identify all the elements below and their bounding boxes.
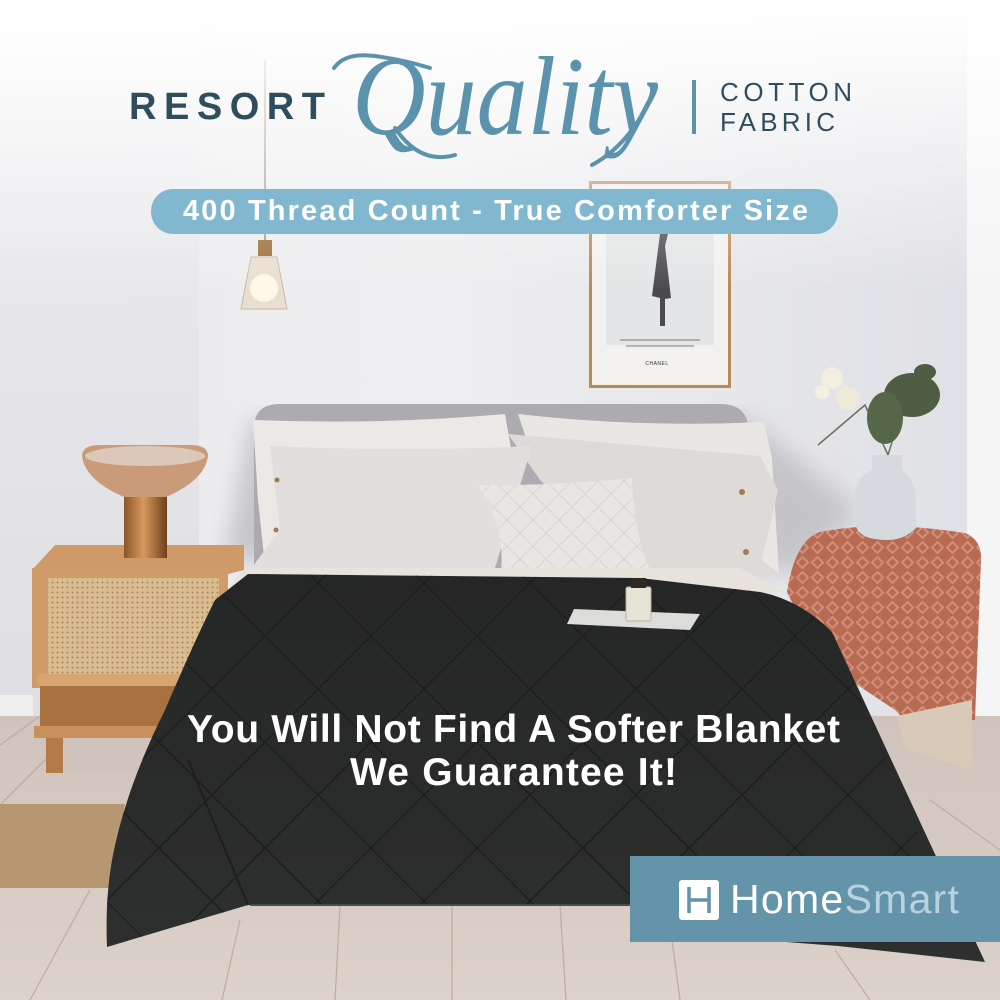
brand name: HomeSmart [730, 876, 960, 922]
subheading: cotton fabric [720, 77, 852, 137]
icon: H logo [679, 880, 719, 920]
bed sheet [225, 568, 785, 592]
table lamp [82, 445, 208, 558]
guarantee text: You Will Not Find A Softer Blanket [187, 708, 840, 751]
pendant lamp [241, 60, 287, 309]
dark blanket [107, 574, 985, 962]
nightstand [32, 545, 244, 773]
perfume and card on bed [567, 578, 700, 630]
subheading: cotton fabric: COTTON [720, 77, 852, 107]
brand panel: HomeSmart [630, 856, 1000, 942]
framed poster: CHANEL [645, 361, 669, 367]
vase with flowers [815, 364, 940, 540]
pillows [250, 414, 782, 576]
headline: Resort Quality: RESORT [129, 86, 325, 128]
framed poster [589, 181, 731, 388]
guarantee text: We Guarantee It! [350, 751, 677, 794]
divider [692, 80, 696, 134]
white fade at top [0, 0, 1000, 290]
guarantee text [187, 708, 840, 794]
headboard [254, 404, 748, 570]
doormat [0, 804, 125, 888]
wood floor [0, 716, 1000, 1000]
subheading: cotton fabric: FABRIC [720, 107, 835, 137]
quilted cushion [478, 478, 655, 580]
headline: Resort Quality [129, 35, 658, 165]
banner: thread count: 400 Thread Count - True Comforter Size [183, 195, 808, 227]
banner: thread count [151, 189, 838, 234]
side table [787, 526, 981, 770]
shadow above bed [225, 420, 860, 570]
headline: Resort Quality: Quality [352, 35, 658, 159]
room background [0, 0, 1000, 780]
